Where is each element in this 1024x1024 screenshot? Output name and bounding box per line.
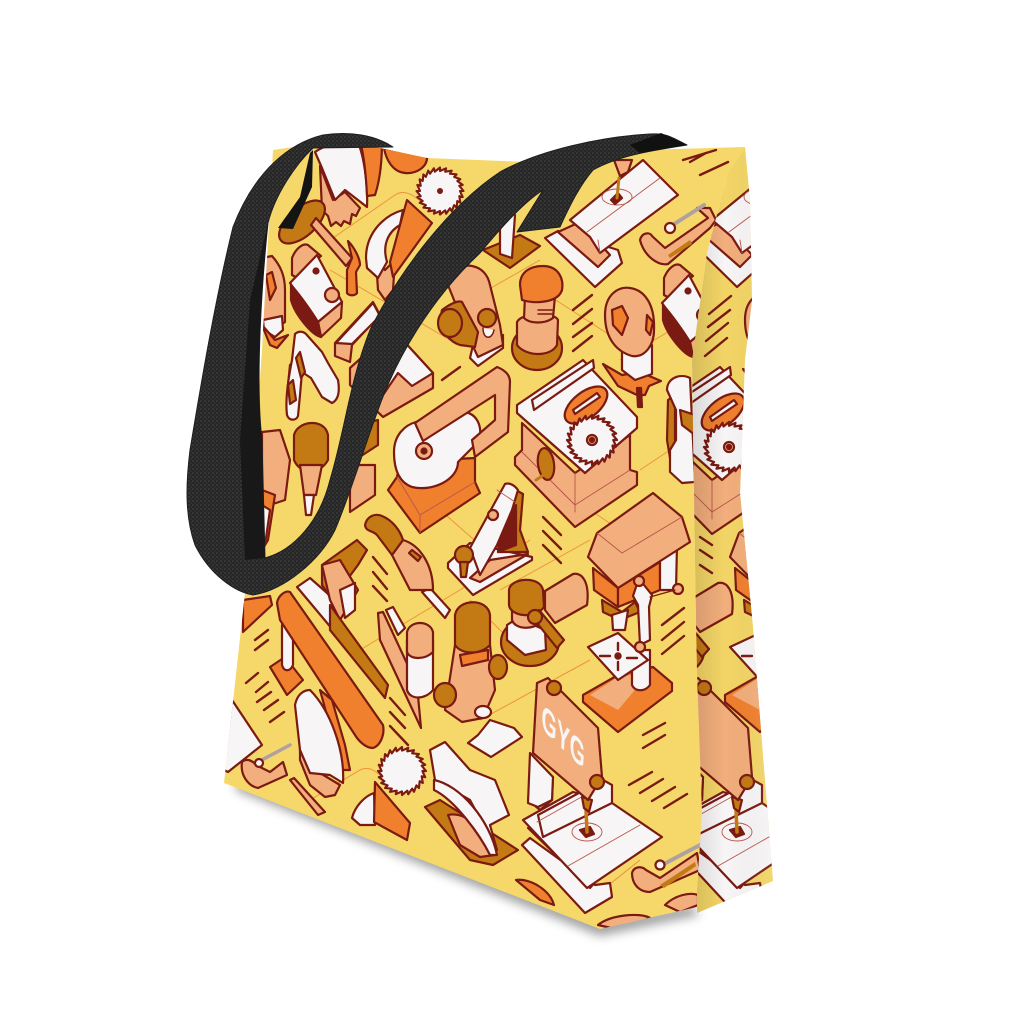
gusset tool pattern <box>646 147 832 915</box>
strap: black handle <box>187 134 687 595</box>
nail: single near scroll saw <box>442 367 460 380</box>
tool: jig saw left edge <box>262 256 288 348</box>
tool: orange blade guard <box>352 782 410 840</box>
tool: router <box>434 602 522 757</box>
tool: bench vice base <box>278 199 326 245</box>
tool: belt sander <box>290 245 342 337</box>
nails: four beside orbital sander <box>573 295 592 351</box>
tool: right side drill repeat <box>667 376 695 483</box>
tool: oscillating tool <box>365 515 450 618</box>
gusset: table saw repeat <box>652 367 774 534</box>
thin grid lines <box>314 192 668 884</box>
tool: scroll saw <box>388 367 510 533</box>
logo text on band saw: GYG <box>541 695 586 778</box>
gusset: nails <box>700 296 731 573</box>
tool: circular saw guard <box>366 200 432 300</box>
tool: circular saw lower left <box>295 690 350 797</box>
gusset: band saw repeat <box>672 678 812 913</box>
tool: hand drill <box>286 332 339 420</box>
nails: bottom cluster <box>629 723 687 808</box>
tool: circular saw base <box>425 742 518 865</box>
ground shadow <box>235 775 700 936</box>
nails: left cluster <box>246 630 284 722</box>
gusset: fold shading <box>692 147 775 915</box>
tool: lower block <box>335 302 433 417</box>
tool: scroll jig saw <box>603 288 661 407</box>
strap: right end dark underside <box>630 133 687 153</box>
tool: left tall tools <box>258 420 378 555</box>
gusset: drill table repeat <box>687 160 820 287</box>
tool: bottom clamp <box>632 845 700 892</box>
strap: inner tail <box>278 150 313 229</box>
nails: three beside plane <box>543 517 561 563</box>
tool: C clamp <box>640 205 716 264</box>
tool: drill press <box>583 493 690 732</box>
gusset: drill press roof repeat <box>725 493 832 732</box>
tool: drill press table top <box>545 160 678 287</box>
tool: circular saw top <box>315 140 427 226</box>
tool: band saw <box>522 678 662 913</box>
tool: chainsaw <box>270 540 388 748</box>
tool: lower-left clamp and plate <box>224 700 325 815</box>
front panel <box>224 143 745 929</box>
side gusset <box>692 147 773 913</box>
gusset: jig saw repeat <box>743 293 801 412</box>
tool: right side sander repeat <box>662 265 714 357</box>
tool: orange block left <box>243 596 272 632</box>
front panel tool pattern <box>224 140 728 930</box>
strap: left inner shadow <box>240 223 268 560</box>
tool: power sander <box>501 574 588 666</box>
tool: bottom fragments <box>516 880 698 930</box>
tool: orbital sander <box>512 266 562 370</box>
tool: drill press table fragment <box>483 205 540 268</box>
tote bag body <box>224 143 773 929</box>
tool: jig saw nailer <box>378 607 433 728</box>
tool: hand plane <box>448 483 532 595</box>
tool: table saw <box>515 360 637 527</box>
nails: top right <box>683 150 728 175</box>
nails: center <box>373 557 684 745</box>
icon: saw blade lower <box>378 747 426 795</box>
tool: planer <box>438 266 503 366</box>
icon: saw blade <box>416 168 464 214</box>
blade hub <box>437 188 443 194</box>
gusset: sander repeat <box>646 583 733 675</box>
tool: hammer <box>311 218 360 295</box>
